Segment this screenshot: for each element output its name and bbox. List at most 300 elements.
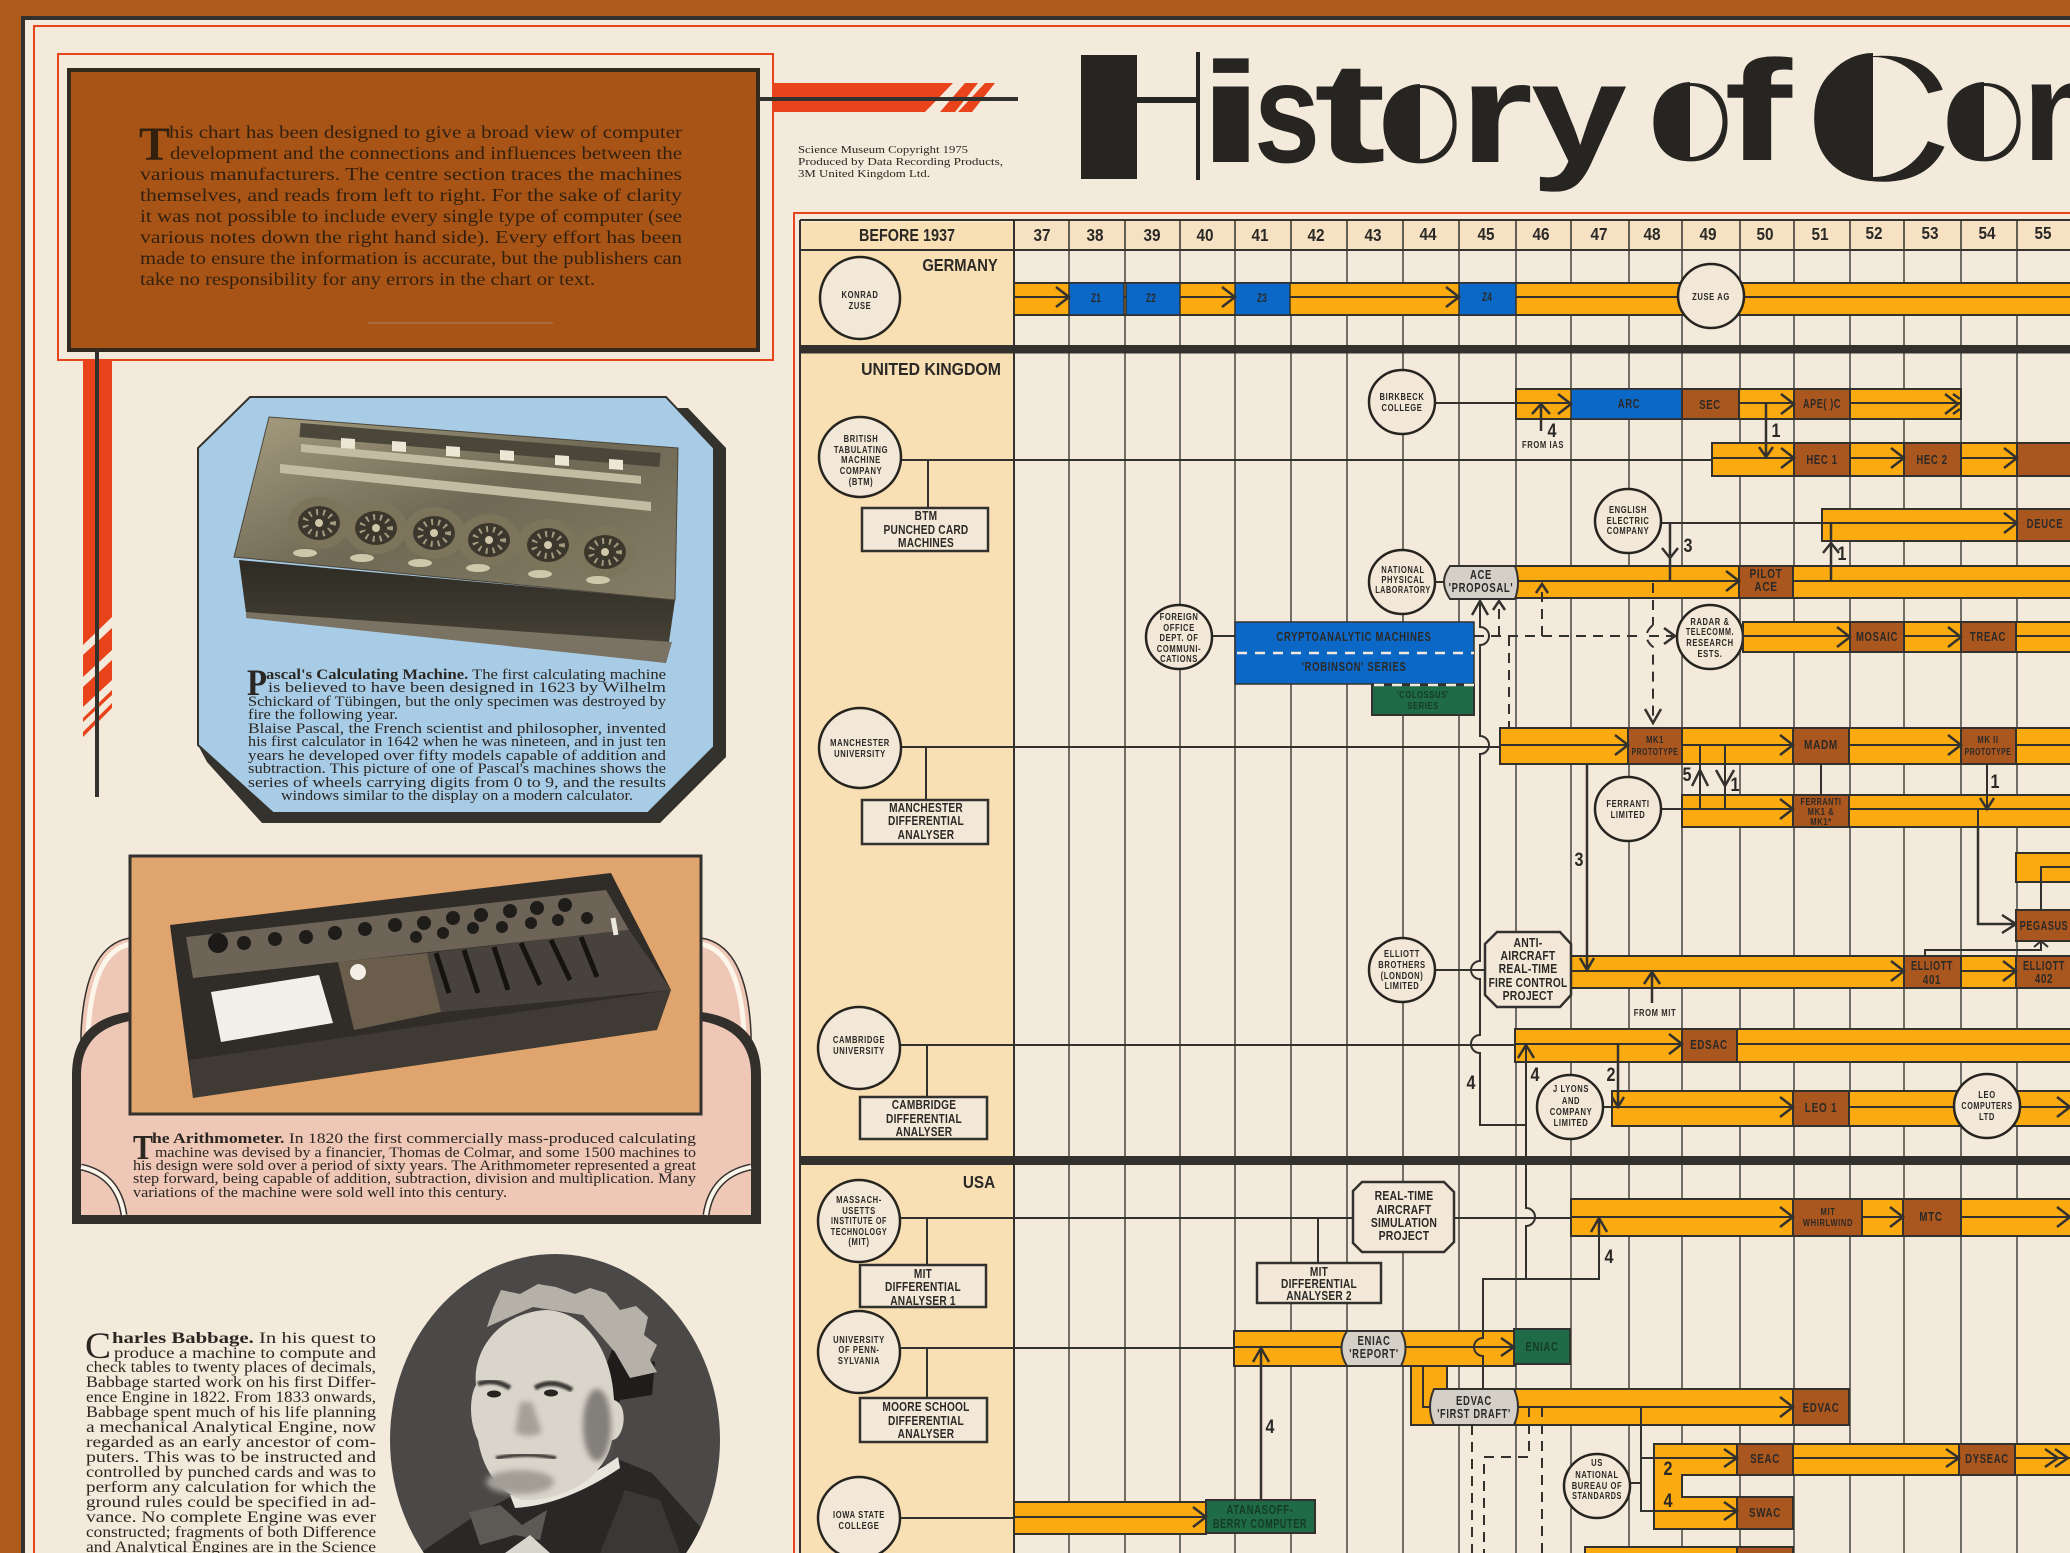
photo: Arithmometer xyxy=(130,856,701,1114)
header row: years: 43 xyxy=(1364,225,1382,245)
company: Iowa State College xyxy=(818,1477,900,1553)
company: Iowa State College: COLLEGE xyxy=(839,1520,879,1531)
band: MIT Whirlwind and MTC: WHIRLWIND xyxy=(1803,1217,1853,1228)
band: Manchester machines xyxy=(1500,728,2070,764)
company: English Electric Company xyxy=(1595,489,1661,553)
box: MIT differential analyser 1: MIT xyxy=(914,1267,932,1281)
company: US National Bureau of Standards: BUREAU OF xyxy=(1572,1480,1622,1491)
company: Manchester University xyxy=(819,708,901,788)
text: Charles Babbage: Babbage spent much of his life planning xyxy=(86,1404,376,1421)
company: University of Pennsylvania: SYLVANIA xyxy=(838,1355,880,1366)
text: Pascal's calculating machine xyxy=(247,663,667,804)
band: Atanasoff-Berry computer: BERRY COMPUTER xyxy=(1213,1518,1307,1531)
company: National Physical Laboratory: NATIONAL xyxy=(1381,564,1425,575)
band: Ferranti machines: MK1 & xyxy=(1808,806,1834,817)
band: Atanasoff-Berry computer xyxy=(1014,1500,1315,1534)
portrait: Charles Babbage xyxy=(385,1250,725,1553)
band: Ferranti machines: MK1* xyxy=(1810,816,1832,827)
title xyxy=(1078,17,2070,218)
band: Manchester machines: PROTOTYPE xyxy=(1965,746,2011,757)
header row: years: 39 xyxy=(1143,225,1161,245)
introduction text: T xyxy=(139,118,170,171)
text: Charles Babbage: puters. This was to be instructed and xyxy=(86,1449,376,1466)
company: Radar and Telecommunications Research Establishment: ESTS. xyxy=(1698,648,1722,659)
box: anti-aircraft real-time fire control project: PROJECT xyxy=(1503,989,1554,1003)
arrow: APE(X)C to HEC xyxy=(1759,403,1781,457)
copyright credit xyxy=(798,145,1003,180)
company: Manchester University: UNIVERSITY xyxy=(834,748,886,759)
header row: years: 55 xyxy=(2034,223,2052,243)
company: J Lyons and Company: LIMITED xyxy=(1554,1117,1588,1128)
company: US National Bureau of Standards: NATIONAL xyxy=(1575,1469,1619,1480)
text: Charles Babbage: C xyxy=(85,1326,111,1367)
text: Charles Babbage: Babbage started work on his first Differ- xyxy=(86,1374,376,1391)
band: SEAC, DYSEAC and SWAC: DYSEAC xyxy=(1965,1453,2009,1466)
title: H xyxy=(1078,17,1204,218)
text: Charles Babbage: constructed; fragments of both Difference xyxy=(86,1524,376,1541)
band: Ferranti machines xyxy=(1682,795,2070,827)
box: Manchester differential analyser: ANALYSER xyxy=(898,828,955,842)
title: o xyxy=(1378,34,1462,193)
arrow: from MIT: FROM MIT xyxy=(1634,1007,1676,1018)
influence line: EDVAC report to British machines: 4 xyxy=(1467,1072,1476,1093)
band: ENIAC: 'REPORT' xyxy=(1349,1348,1399,1361)
company: LEO Computers: LTD xyxy=(1979,1111,1995,1122)
band: ENIAC: ENIAC xyxy=(1358,1335,1390,1348)
box: Manchester differential analyser: MANCHESTER xyxy=(889,801,963,815)
band: HEC series: HEC 1 xyxy=(1806,454,1838,467)
band: ACE xyxy=(1515,566,2070,598)
arrow: from IAS: FROM IAS xyxy=(1522,439,1564,450)
box: real-time aircraft simulation project: SIMULATION xyxy=(1371,1216,1437,1230)
band: MIT Whirlwind and MTC: MIT xyxy=(1821,1206,1835,1217)
panel: introduction xyxy=(58,54,773,360)
text: Charles Babbage: ground rules could be specified in ad- xyxy=(86,1494,376,1511)
box: Cambridge differential analyser: ANALYSER xyxy=(896,1125,953,1139)
company: University of Pennsylvania: UNIVERSITY xyxy=(833,1334,885,1345)
box: Moore School differential analyser: MOORE SCHOOL xyxy=(882,1400,970,1414)
band: SEAC, DYSEAC and SWAC: SEAC xyxy=(1750,1453,1780,1466)
text: Charles Babbage xyxy=(85,1326,377,1553)
company: Ferranti Limited: FERRANTI xyxy=(1606,798,1650,809)
box: ACE proposal: 'PROPOSAL' xyxy=(1449,582,1513,595)
company: MIT: INSTITUTE OF xyxy=(831,1215,887,1226)
band: ENIAC xyxy=(1234,1329,1570,1407)
company: Radar and Telecommunications Research Establishment: TELECOMM. xyxy=(1686,626,1734,637)
connectors: horizontal company lines xyxy=(900,403,1822,1518)
text: Pascal's calculating machine: series of wheels carrying digits from 0 to 9, and the results xyxy=(248,775,666,791)
band: Konrad Zuse xyxy=(1014,283,2070,315)
panel: the Arithmometer xyxy=(72,856,761,1224)
introduction text: take no responsibility for any errors in the chart or text. xyxy=(140,269,595,289)
text: the Arithmometer: variations of the machine were sold well into this century. xyxy=(133,1185,507,1201)
company: Konrad Zuse xyxy=(820,257,900,339)
introduction text xyxy=(139,118,682,289)
band: EDVAC offshoot xyxy=(1406,1366,1447,1425)
band: DEUCE: DEUCE xyxy=(2027,518,2063,531)
band: Atanasoff-Berry computer: ATANASOFF- xyxy=(1226,1504,1294,1517)
box: Manchester differential analyser: DIFFERENTIAL xyxy=(888,814,964,828)
box: MIT differential analyser 1 xyxy=(860,1265,986,1308)
box: cryptoanalytic machines: CRYPTOANALYTIC MACHINES xyxy=(1276,631,1432,644)
company: US National Bureau of Standards: STANDARDS xyxy=(1572,1490,1622,1501)
company: Zuse AG: ZUSE AG xyxy=(1692,291,1730,302)
box: Pegasus xyxy=(2016,910,2070,941)
copyright credit: 3M United Kingdom Ltd. xyxy=(798,169,930,180)
arrow: from IAS xyxy=(1522,404,1564,450)
header row: years: BEFORE 1937 xyxy=(859,226,955,245)
band: SEAC, DYSEAC and SWAC: 4 xyxy=(1664,1490,1673,1511)
company: Radar and Telecommunications Research Establishment: RADAR & xyxy=(1690,616,1730,627)
company: National Physical Laboratory xyxy=(1369,550,1435,614)
company: Radar and Telecommunications Research Establishment xyxy=(1677,605,1743,669)
box: anti-aircraft real-time fire control project xyxy=(1485,932,1571,1007)
copyright credit: Science Museum Copyright 1975 xyxy=(798,145,968,156)
text: the Arithmometer: step forward, being capable of addition, subtraction, division and multiplication. Many xyxy=(133,1171,697,1187)
company: Elliott Brothers: (LONDON) xyxy=(1381,970,1423,981)
company: Manchester University: MANCHESTER xyxy=(830,737,890,748)
title: t xyxy=(1314,34,1386,193)
box: EDVAC first draft xyxy=(1430,1389,1518,1425)
header row: years: 48 xyxy=(1643,224,1661,244)
box: ACE proposal: ACE xyxy=(1470,569,1492,582)
band: Birkbeck machines xyxy=(1516,389,1961,419)
band: EDVAC: EDVAC xyxy=(1803,1402,1839,1415)
band: MIT Whirlwind and MTC xyxy=(1571,1199,2070,1236)
band: Elliott machines: ELLIOTT xyxy=(1911,960,1953,973)
band: Manchester machines: MADM xyxy=(1804,739,1838,752)
company: J Lyons and Company xyxy=(1537,1075,1603,1139)
band: Elliott machines: ELLIOTT xyxy=(2023,960,2065,973)
band: SEAC, DYSEAC and SWAC: 2 xyxy=(1664,1458,1673,1479)
arrow: English Electric to ACE: 3 xyxy=(1684,535,1693,556)
band: Manchester machines: MK II xyxy=(1977,734,1999,745)
band: DEUCE xyxy=(1822,509,2070,541)
band: Manchester machines: PROTOTYPE xyxy=(1632,746,1678,757)
text: Pascal's calculating machine: is believed to have been designed in 1623 by Wilhelm xyxy=(268,680,667,696)
box: MIT differential analyser 1: DIFFERENTIAL xyxy=(885,1280,961,1294)
arrow: from MIT xyxy=(1634,972,1676,1018)
arrow: APE(X)C to HEC: 1 xyxy=(1772,420,1781,441)
title: C xyxy=(1806,19,1950,218)
company: Foreign Office: OFFICE xyxy=(1163,622,1195,633)
band: EDSAC: EDSAC xyxy=(1690,1039,1728,1052)
band: Birkbeck machines: SEC xyxy=(1699,399,1721,412)
text: the Arithmometer: T xyxy=(133,1128,153,1167)
header row: years: 47 xyxy=(1590,224,1608,244)
box: Pegasus: PEGASUS xyxy=(2020,920,2068,933)
company: Elliott Brothers: LIMITED xyxy=(1385,980,1419,991)
band: MOSAIC and TREAC xyxy=(1743,622,2070,652)
company: Ferranti Limited xyxy=(1595,777,1661,841)
text: Charles Babbage: perform any calculation for which the xyxy=(86,1479,376,1496)
chart background: country column xyxy=(800,222,1014,1553)
band: Birkbeck machines: ARC xyxy=(1618,398,1640,411)
box: real-time aircraft simulation project: REAL-TIME xyxy=(1375,1189,1433,1203)
title: f xyxy=(1724,32,1793,191)
header row: years: 54 xyxy=(1978,223,1996,243)
company: Elliott Brothers: ELLIOTT xyxy=(1384,948,1420,959)
header row: years: 37 xyxy=(1033,225,1051,245)
band: ACE: PILOT xyxy=(1750,568,1782,581)
box: Moore School differential analyser: ANALYSER xyxy=(898,1427,955,1441)
text: Pascal's calculating machine: Blaise Pascal, the French scientist and philosopher, invented xyxy=(248,721,667,737)
company: British Tabulating Machine Company: BRITISH xyxy=(844,433,878,444)
company: University of Pennsylvania xyxy=(818,1311,900,1393)
title: s xyxy=(1254,34,1320,193)
box: real-time aircraft simulation project: AIRCRAFT xyxy=(1376,1203,1432,1217)
box: BTM punched card machines xyxy=(862,508,988,551)
company: Foreign Office: CATIONS xyxy=(1160,653,1198,664)
company: Foreign Office xyxy=(1146,605,1212,669)
box: anti-aircraft real-time fire control project: REAL-TIME xyxy=(1499,962,1557,976)
band: SEAC, DYSEAC and SWAC xyxy=(1641,1407,2070,1529)
box: anti-aircraft real-time fire control project: AIRCRAFT xyxy=(1500,949,1556,963)
title: i xyxy=(1195,34,1267,193)
company: Foreign Office: DEPT. OF xyxy=(1159,632,1199,643)
photo: Pascal's machine xyxy=(234,417,678,663)
company: British Tabulating Machine Company: TABULATING xyxy=(834,444,888,455)
company: MIT: USETTS xyxy=(842,1205,876,1216)
box: EDVAC first draft: 'FIRST DRAFT' xyxy=(1437,1408,1511,1421)
title: o xyxy=(1648,32,1733,191)
title: y xyxy=(1531,34,1627,193)
company: Iowa State College: IOWA STATE xyxy=(833,1509,885,1520)
introduction text: his chart has been designed to give a broad view of computer xyxy=(169,122,682,142)
band: SEAC, DYSEAC and SWAC: SWAC xyxy=(1749,1507,1781,1520)
introduction text: made to ensure the information is accurate, but the publishers can xyxy=(140,248,682,268)
band: Ferranti machines: FERRANTI xyxy=(1801,796,1841,807)
company: LEO Computers: COMPUTERS xyxy=(1961,1100,2013,1111)
text: the Arithmometer: machine was devised by a financier, Thomas de Colmar, and some 1500 machines to xyxy=(155,1145,696,1161)
chart: timeline panel xyxy=(794,213,2070,1553)
country heading: Germany: GERMANY xyxy=(922,256,998,275)
text: Pascal's calculating machine: ascal's Calculating Machine. The first calculating machine xyxy=(266,667,666,683)
company: British Tabulating Machine Company: (BTM) xyxy=(849,476,873,487)
header row: years: 40 xyxy=(1196,225,1214,245)
arrows: Manchester to Ferranti: 1 xyxy=(1991,771,2000,792)
arrow: Manchester to Elliott: 3 xyxy=(1575,849,1584,870)
text: Pascal's calculating machine: years he developed over fifty models capable of addition and xyxy=(248,748,667,764)
header row: years: 46 xyxy=(1532,224,1550,244)
company: British Tabulating Machine Company: MACHINE xyxy=(841,454,881,465)
band: HEC series xyxy=(1712,443,2070,476)
header row: years: 52 xyxy=(1865,223,1883,243)
header row: years: 41 xyxy=(1251,225,1269,245)
band: MOSAIC and TREAC: TREAC xyxy=(1970,631,2006,644)
company: English Electric Company: ENGLISH xyxy=(1609,504,1647,515)
arrow: English Electric to ACE xyxy=(1662,523,1693,581)
band: ENIAC: ENIAC xyxy=(1526,1341,1558,1354)
company: Birkbeck College: BIRKBECK xyxy=(1380,391,1424,402)
header row: years: 50 xyxy=(1756,224,1774,244)
box: Moore School differential analyser: DIFFERENTIAL xyxy=(888,1414,964,1428)
decoration: vertical red stripe bar xyxy=(83,350,112,797)
company: MIT: MASSACH- xyxy=(836,1194,882,1205)
text: the Arithmometer: his design were sold over a period of sixty years. The Arithmometer represented a great xyxy=(133,1158,696,1174)
influence line: EDVAC report to British machines xyxy=(1467,601,1614,1389)
band: MIT Whirlwind and MTC: MTC xyxy=(1919,1211,1943,1224)
band: Konrad Zuse: Z1 xyxy=(1091,293,1101,305)
country heading: United Kingdom: UNITED KINGDOM xyxy=(861,359,1001,379)
header row: years: 51 xyxy=(1811,224,1829,244)
box: Cambridge differential analyser: DIFFERENTIAL xyxy=(886,1112,962,1126)
arrows: Manchester to Ferranti: 1 xyxy=(1731,774,1740,795)
text: Pascal's calculating machine: subtraction. This picture of one of Pascal's machines shows the xyxy=(248,761,666,777)
box: Cambridge differential analyser: CAMBRIDGE xyxy=(892,1098,956,1112)
box: EDVAC first draft: EDVAC xyxy=(1456,1395,1492,1408)
arrow: Ferranti to Pegasus xyxy=(1978,827,2016,933)
introduction text: it was not possible to include every single type of computer (see xyxy=(140,206,682,226)
header row: years: 49 xyxy=(1699,224,1717,244)
text: Pascal's calculating machine: windows similar to the display on a modern calculator. xyxy=(281,788,633,804)
company: MIT: TECHNOLOGY xyxy=(831,1226,887,1237)
country heading: USA: USA xyxy=(963,1172,995,1192)
company: Radar and Telecommunications Research Establishment: RESEARCH xyxy=(1686,637,1734,648)
introduction text: various notes down the right hand side). Every effort has been xyxy=(140,227,682,247)
header row: years xyxy=(800,220,2070,1553)
title: r xyxy=(1459,34,1533,193)
introduction text: various manufacturers. The centre section traces the machines xyxy=(140,164,682,184)
company: Birkbeck College: COLLEGE xyxy=(1382,402,1422,413)
arrows: Manchester to Ferranti: 5 xyxy=(1683,764,1692,785)
box: ACE proposal xyxy=(1444,566,1518,599)
band: bottom fragment xyxy=(1585,1547,1793,1553)
arrow: Atanasoff-Berry to ENIAC xyxy=(1253,1348,1275,1500)
band: Elliott machines: 401 xyxy=(1923,974,1941,987)
text: Pascal's calculating machine: his first calculator in 1642 when he was nineteen, and in just ten xyxy=(248,734,667,750)
company: J Lyons and Company: AND xyxy=(1562,1095,1580,1106)
arrow: EDSAC to LEO: 2 xyxy=(1607,1064,1616,1085)
header row: years: 45 xyxy=(1477,224,1495,244)
arrow: ACE to DEUCE xyxy=(1823,524,1847,581)
company: Foreign Office: COMMUNI- xyxy=(1157,643,1201,654)
text: Charles Babbage: regarded as an early ancestor of com- xyxy=(86,1434,376,1451)
box: real-time aircraft simulation project xyxy=(1353,1182,1454,1252)
company: British Tabulating Machine Company xyxy=(819,417,901,497)
text: Charles Babbage: ence Engine in 1822. From 1833 onwards, xyxy=(86,1389,376,1406)
influence line: EDVAC report to British machines: 4 xyxy=(1605,1246,1614,1267)
company: National Physical Laboratory: PHYSICAL xyxy=(1381,574,1425,585)
box: MIT differential analyser 2: ANALYSER 2 xyxy=(1286,1289,1352,1303)
company: English Electric Company: ELECTRIC xyxy=(1607,515,1649,526)
box: MIT differential analyser 2 xyxy=(1257,1263,1381,1303)
arrow: Atanasoff-Berry to ENIAC: 4 xyxy=(1266,1416,1275,1437)
band: HEC series: HEC 2 xyxy=(1916,454,1948,467)
company: English Electric Company: COMPANY xyxy=(1607,525,1649,536)
header row: years: 44 xyxy=(1419,224,1437,244)
box: cryptoanalytic machines: 'COLOSSUS' xyxy=(1397,689,1449,700)
band: Elliott machines xyxy=(1571,941,2070,988)
company: US National Bureau of Standards: US xyxy=(1591,1457,1603,1468)
arrow: from IAS: 4 xyxy=(1548,420,1557,441)
company: MIT: (MIT) xyxy=(848,1236,870,1247)
company: J Lyons and Company: J LYONS xyxy=(1553,1083,1589,1094)
panel: Pascal's calculating machine xyxy=(198,397,726,823)
box: BTM punched card machines: BTM xyxy=(915,509,937,523)
box: Manchester differential analyser xyxy=(862,800,988,844)
band: Manchester machines: MK1 xyxy=(1646,734,1664,745)
header row: years: 53 xyxy=(1921,223,1939,243)
band: upper right fragment xyxy=(2016,853,2070,910)
band: Birkbeck machines: APE( )C xyxy=(1803,398,1841,411)
company: National Physical Laboratory: LABORATORY xyxy=(1375,584,1431,595)
arrows: Manchester to Ferranti xyxy=(1683,745,2000,809)
text: Pascal's calculating machine: fire the following year. xyxy=(248,707,398,723)
text: the Arithmometer: he Arithmometer. In 1820 the first commercially mass-produced calculating xyxy=(152,1131,696,1147)
box: anti-aircraft real-time fire control project: FIRE CONTROL xyxy=(1489,976,1567,990)
company: Konrad Zuse: KONRAD xyxy=(842,289,878,300)
company: Zuse AG xyxy=(1678,264,1744,328)
band: Konrad Zuse: Z3 xyxy=(1257,293,1267,305)
text: Pascal's calculating machine: P xyxy=(247,663,267,704)
band: MOSAIC and TREAC: MOSAIC xyxy=(1856,631,1898,644)
company: MIT xyxy=(818,1180,900,1262)
introduction text: development and the connections and influences between the xyxy=(170,143,682,163)
text: Charles Babbage: produce a machine to compute and xyxy=(114,1345,376,1362)
company: US National Bureau of Standards xyxy=(1564,1454,1630,1518)
band: LEO: LEO 1 xyxy=(1805,1102,1837,1115)
band: Konrad Zuse: Z2 xyxy=(1146,293,1156,305)
band: EDSAC xyxy=(1515,1029,2070,1062)
text: Charles Babbage: harles Babbage. In his quest to xyxy=(112,1330,376,1347)
influence line: EDVAC report to British machines: 4 xyxy=(1531,1064,1540,1085)
company: LEO Computers xyxy=(1954,1074,2020,1138)
company: Elliott Brothers: BROTHERS xyxy=(1378,959,1426,970)
box: BTM punched card machines: PUNCHED CARD xyxy=(884,523,968,537)
company: Cambridge University xyxy=(818,1007,900,1089)
band: ACE: ACE xyxy=(1754,581,1778,594)
box: cryptoanalytic machines xyxy=(1235,622,1474,715)
decoration: red stripe bar to title xyxy=(759,83,1018,112)
header row: years: 38 xyxy=(1086,225,1104,245)
company: Foreign Office: FOREIGN xyxy=(1160,611,1198,622)
text: Charles Babbage: a mechanical Analytical Engine, now xyxy=(86,1419,377,1436)
arrow: into Whirlwind band xyxy=(1591,1218,1607,1236)
box: real-time aircraft simulation project: PROJECT xyxy=(1379,1229,1430,1243)
company: British Tabulating Machine Company: COMPANY xyxy=(840,465,882,476)
arrow: ACE to DEUCE: 1 xyxy=(1838,543,1847,564)
company: J Lyons and Company: COMPANY xyxy=(1550,1106,1592,1117)
company: Cambridge University: CAMBRIDGE xyxy=(833,1034,885,1045)
arrow: Manchester to Elliott xyxy=(1575,764,1594,970)
band: Elliott machines: 402 xyxy=(2035,973,2053,986)
band: LEO xyxy=(1612,1091,2070,1126)
company: University of Pennsylvania: OF PENN- xyxy=(838,1344,880,1355)
box: Moore School differential analyser xyxy=(860,1398,987,1442)
text: Charles Babbage: controlled by punched cards and was to xyxy=(86,1464,376,1481)
copyright credit: Produced by Data Recording Products, xyxy=(798,157,1003,168)
company: Birkbeck College xyxy=(1369,370,1435,434)
box: MIT differential analyser 2: DIFFERENTIAL xyxy=(1281,1277,1357,1291)
box: BTM punched card machines: MACHINES xyxy=(898,536,954,550)
text: Charles Babbage: vance. No complete Engine was ever xyxy=(86,1509,377,1526)
band: Konrad Zuse: Z4 xyxy=(1482,292,1492,304)
title: o xyxy=(1942,32,2026,191)
arrow: EDSAC to LEO xyxy=(1607,1044,1624,1107)
box: MIT differential analyser 1: ANALYSER 1 xyxy=(890,1294,956,1308)
band: EDVAC xyxy=(1515,1389,1849,1425)
company: Konrad Zuse: ZUSE xyxy=(849,300,871,311)
company: Elliott Brothers xyxy=(1369,938,1435,1002)
box: cryptoanalytic machines: 'ROBINSON' SERIES xyxy=(1302,661,1406,674)
text: the Arithmometer xyxy=(133,1128,697,1201)
header row: years: 42 xyxy=(1307,225,1325,245)
company: Ferranti Limited: LIMITED xyxy=(1611,809,1645,820)
company: Cambridge University: UNIVERSITY xyxy=(833,1045,885,1056)
dashed links from cryptoanalytic machines xyxy=(1474,583,1675,742)
text: Pascal's calculating machine: Schickard of Tübingen, but the only specimen was destroyed by xyxy=(248,694,667,710)
